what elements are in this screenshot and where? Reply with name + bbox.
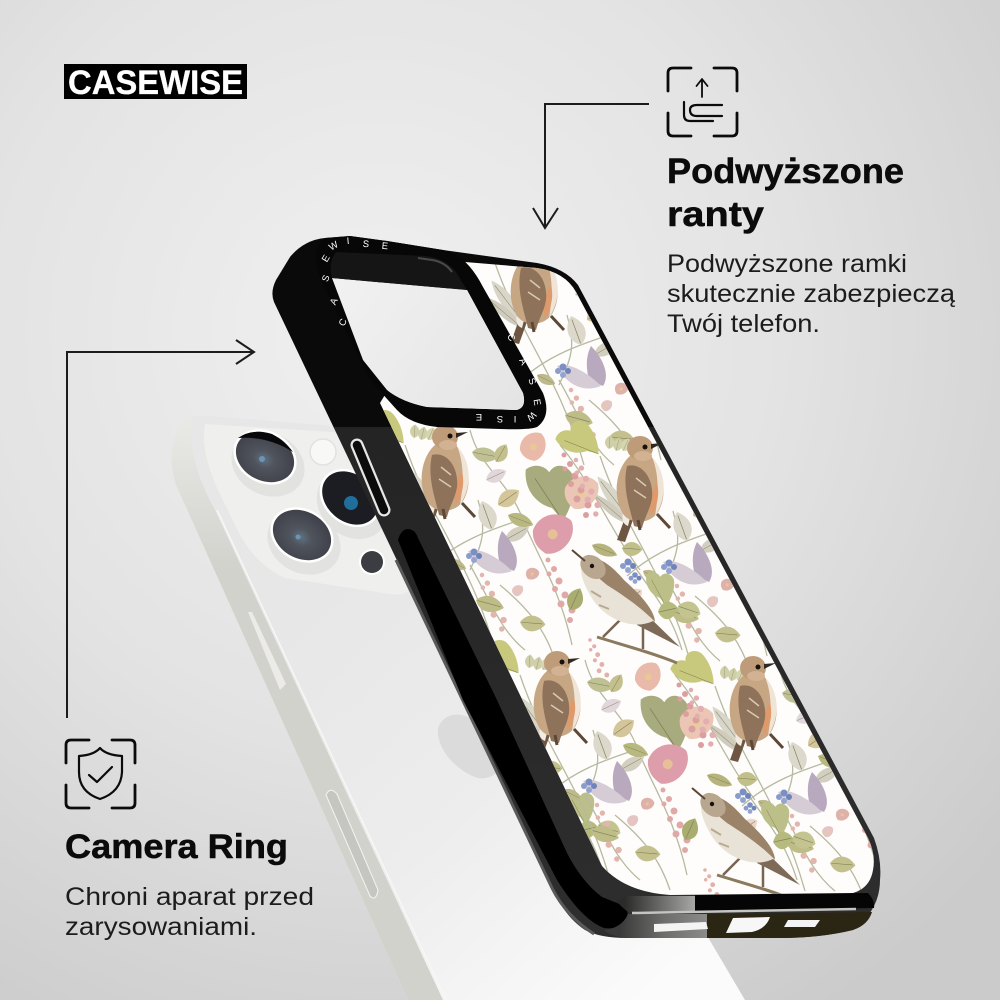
heading: Camera Ring: Camera Ring <box>65 828 288 866</box>
bird centre <box>572 550 680 663</box>
transparent case <box>272 236 880 938</box>
bottom grey band upper <box>616 896 696 912</box>
ring lettering <box>320 236 542 424</box>
ring lettering: E <box>320 253 333 264</box>
text: raised edges description <box>667 250 955 338</box>
arrow: raised edges pointer <box>533 104 649 228</box>
bottom black band upper <box>695 893 874 911</box>
lens bottom <box>256 497 352 587</box>
bird lower left <box>534 651 587 757</box>
lens top <box>220 419 316 509</box>
ring lettering: A <box>516 356 529 368</box>
printed pattern: birds and flowers <box>380 262 874 895</box>
window opening <box>332 278 524 410</box>
heading: Podwyższone ranty: Podwyższone <box>667 152 904 191</box>
heading: Podwyższone ranty: ranty <box>667 195 765 234</box>
side button lower <box>326 790 378 898</box>
volume button <box>357 445 384 510</box>
usb opening <box>726 917 770 933</box>
phone side band <box>172 418 443 1000</box>
camera plateau <box>204 424 410 594</box>
band highlight <box>217 510 446 1000</box>
bottom edge olive band <box>707 912 872 938</box>
outer light edge <box>396 560 594 934</box>
side button upper <box>248 612 286 690</box>
icon: raised edge <box>668 68 737 136</box>
heading: Podwyższone ranty <box>667 152 904 234</box>
ring lettering: C <box>504 332 517 343</box>
ring lettering: E <box>476 411 482 422</box>
text: raised edges description: skutecznie zabezpieczą <box>667 280 955 308</box>
bottom highlight <box>632 909 856 913</box>
mic opening <box>784 920 820 927</box>
ring lettering: E <box>381 241 389 252</box>
ring highlight <box>418 258 452 272</box>
speaker opening <box>654 922 708 932</box>
bottom edge translucent band <box>604 914 708 938</box>
text: raised edges description: Twój telefon. <box>667 310 820 338</box>
text: camera ring description: Chroni aparat przed <box>65 883 314 911</box>
bird upper left <box>422 427 476 520</box>
ring lettering: W <box>327 239 340 253</box>
ring lettering: I <box>346 236 350 247</box>
ring lettering: S <box>497 413 503 424</box>
apple logo <box>438 715 500 778</box>
sensor <box>359 549 385 575</box>
ring lettering: S <box>525 377 538 387</box>
inner bevel <box>331 252 467 290</box>
ring lettering: S <box>320 274 333 283</box>
ring lettering: I <box>514 413 516 424</box>
arrow: camera ring pointer <box>67 340 254 718</box>
case body <box>272 236 880 938</box>
long black slot <box>398 529 628 928</box>
ring lettering: S <box>362 239 370 250</box>
logo: CASEWISE: CASEWISE <box>68 64 243 102</box>
text: camera ring description <box>65 883 314 941</box>
bird top <box>510 266 565 344</box>
lens right <box>303 457 401 553</box>
bird bottom <box>692 788 800 901</box>
ring lettering: E <box>531 398 542 406</box>
bird upper right <box>617 436 670 542</box>
bird lower right <box>730 656 783 762</box>
icon: shield with check <box>66 740 135 808</box>
camera ring <box>316 236 546 429</box>
text: camera ring description: zarysowaniami. <box>65 913 257 941</box>
flash <box>310 439 336 465</box>
ring lettering: A <box>328 296 341 307</box>
ring lettering: W <box>524 409 538 423</box>
text: raised edges description: Podwyższone ramki <box>667 250 907 278</box>
ring lettering: C <box>337 317 350 328</box>
white phone behind the case <box>172 416 745 1000</box>
